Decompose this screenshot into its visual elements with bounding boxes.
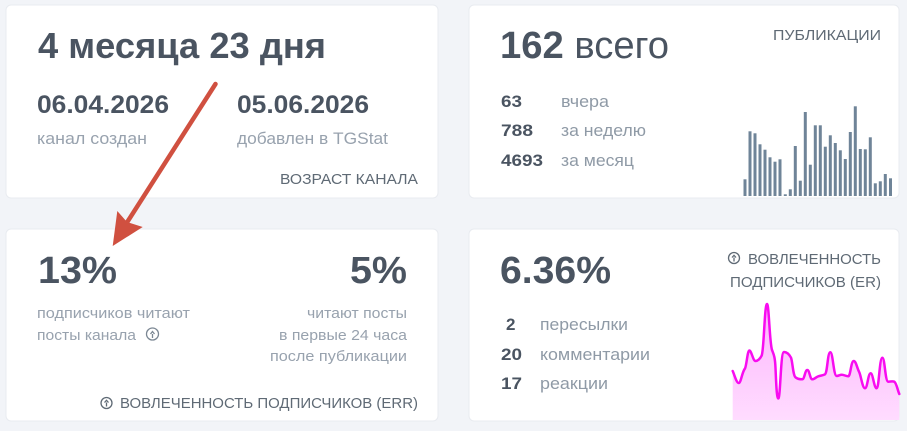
stats rows <box>501 315 650 393</box>
panel label: ER: ВОВЛЕЧЕННОСТЬ <box>748 251 881 268</box>
panel label: ERR: ВОВЛЕЧЕННОСТЬ ПОДПИСЧИКОВ (ERR) <box>120 395 418 412</box>
stats rows: вчера <box>561 92 610 111</box>
stats rows: 788 <box>501 121 533 140</box>
panel label: publications: ПУБЛИКАЦИИ <box>773 27 881 44</box>
right description: в первые 24 часа <box>279 327 408 344</box>
right description <box>270 305 408 365</box>
stats rows: реакции <box>540 374 608 393</box>
stats rows: 17 <box>501 374 522 393</box>
bar chart: publications <box>744 106 892 196</box>
heading: total posts: 162 всего <box>500 25 669 67</box>
left description <box>37 306 190 344</box>
right description: читают посты <box>307 305 407 322</box>
stats rows: комментарии <box>540 345 650 364</box>
stats rows: 20 <box>501 345 522 364</box>
big value: 6.36%: 6.36% <box>500 250 611 292</box>
left description: подписчиков читают <box>37 306 190 322</box>
panel: subscriber engagement ER <box>469 229 899 421</box>
added label: добавлен в TGStat <box>237 129 388 148</box>
stats rows: 4693 <box>501 151 543 170</box>
big value: 13%: 13% <box>38 250 117 292</box>
right description: после публикации <box>270 348 407 365</box>
stats rows <box>501 92 646 170</box>
stats rows: 63 <box>501 92 522 111</box>
panel: publications <box>469 5 899 198</box>
area chart: engagement <box>733 304 899 420</box>
left description: посты канала <box>37 328 137 344</box>
panel label: channel age: ВОЗРАСТ КАНАЛА <box>280 171 418 188</box>
icon: engagement info <box>101 398 112 408</box>
panel: subscriber engagement ERR <box>6 229 438 421</box>
big value: 5%: 5% <box>350 250 407 292</box>
stats rows: 2 <box>506 315 515 334</box>
created label: канал создан <box>37 129 147 148</box>
panel: channel age <box>6 5 438 198</box>
arrow <box>113 84 216 246</box>
stats rows: за неделю <box>561 121 646 140</box>
stats rows: пересылки <box>540 315 628 334</box>
heading: channel age: 4 месяца 23 дня <box>38 25 326 66</box>
panel label: ER: ПОДПИСЧИКОВ (ER) <box>730 274 881 291</box>
added date: 05.06.2026 <box>237 91 369 119</box>
icon: help <box>146 328 158 340</box>
icon: engagement info <box>728 252 740 264</box>
created date: 06.04.2026 <box>37 91 169 119</box>
panel label: ER <box>730 251 881 291</box>
stats rows: за месяц <box>561 151 634 170</box>
